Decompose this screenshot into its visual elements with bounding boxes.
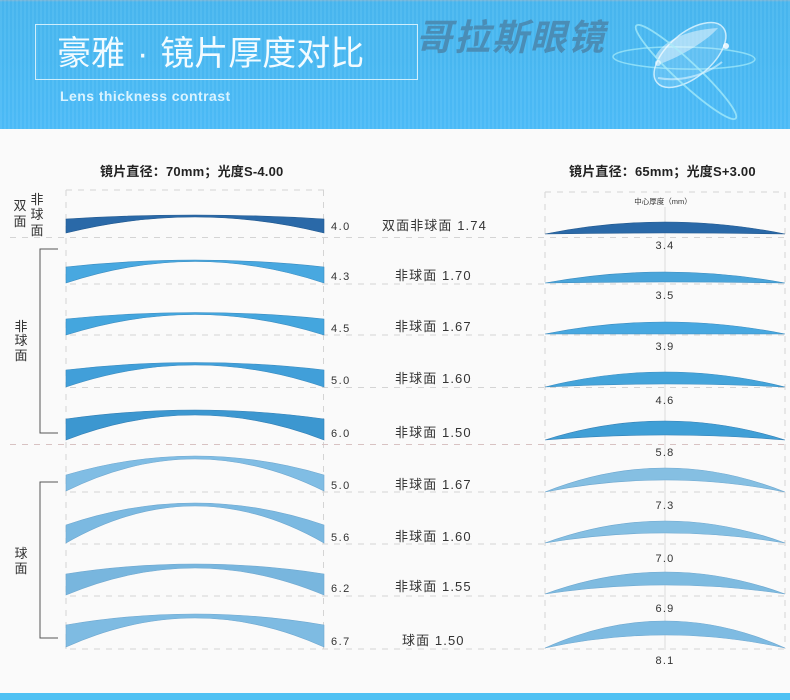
right thickness values: 5.8	[656, 447, 674, 459]
center thickness caption: 中心厚度（mm）	[634, 196, 692, 206]
left thickness values: 6.7	[331, 636, 351, 648]
title frame	[35, 24, 418, 80]
left lenses: S-4.00 profiles	[66, 215, 324, 647]
subtitle: Lens thickness contrast	[60, 88, 231, 104]
lens type and index labels: 非球面 1.55	[395, 579, 472, 594]
lens type and index labels: 双面非球面 1.74	[382, 218, 487, 233]
header banner	[0, 0, 790, 129]
lens type and index labels: 非球面 1.60	[395, 371, 472, 386]
lens type and index labels: 非球面 1.67	[395, 319, 472, 334]
right thickness values: 7.3	[656, 500, 674, 512]
left column header: 镜片直径：70mm；光度S-4.00	[100, 164, 283, 180]
category label: spherical: 面	[14, 561, 28, 576]
left thickness values: 4.5	[331, 323, 351, 335]
left thickness values	[331, 221, 351, 648]
lens type and index labels: 非球面 1.50	[395, 425, 472, 440]
left thickness values: 6.2	[331, 583, 351, 595]
right thickness values: 3.9	[656, 341, 674, 353]
watermark brand: 哥拉斯眼镜	[416, 17, 606, 58]
lens type and index labels: 非球面 1.67	[395, 477, 472, 492]
right thickness values: 8.1	[656, 655, 674, 667]
category label: aspheric: 面	[14, 348, 28, 363]
lens type and index labels: 球面 1.50	[402, 633, 465, 648]
icon: lens with orbit rings	[612, 22, 756, 120]
category label: double aspheric	[13, 192, 44, 238]
bracket: aspheric	[40, 249, 58, 433]
lens type and index labels	[382, 218, 487, 648]
left thickness values: 4.3	[331, 271, 351, 283]
lens type and index labels: 非球面 1.70	[395, 268, 472, 283]
category label: double aspheric: 球	[30, 207, 44, 222]
right column header: 镜片直径：65mm；光度S+3.00	[569, 164, 756, 180]
right thickness values: 3.5	[656, 290, 674, 302]
left thickness values: 5.0	[331, 480, 351, 492]
bracket: spherical	[40, 482, 58, 638]
category label: double aspheric: 面	[30, 223, 44, 238]
left thickness values: 5.0	[331, 375, 351, 387]
category label: aspheric: 非	[14, 319, 28, 334]
category label: spherical	[14, 546, 28, 576]
category label: aspheric: 球	[14, 333, 28, 348]
category label: double aspheric: 双	[13, 198, 27, 213]
right thickness values: 6.9	[656, 603, 674, 615]
right thickness values: 4.6	[656, 395, 674, 407]
category label: aspheric	[14, 319, 28, 363]
title: 豪雅 · 镜片厚度对比	[57, 35, 364, 73]
right lenses: S+3.00 profiles	[545, 222, 785, 648]
left thickness values: 4.0	[331, 221, 351, 233]
right thickness values: 7.0	[656, 553, 674, 565]
lens type and index labels: 非球面 1.60	[395, 529, 472, 544]
category label: spherical: 球	[14, 546, 28, 561]
category label: double aspheric: 非	[30, 192, 44, 207]
category label: double aspheric: 面	[13, 214, 27, 229]
left thickness values: 5.6	[331, 532, 351, 544]
right thickness values: 3.4	[656, 240, 674, 252]
left thickness values: 6.0	[331, 428, 351, 440]
footer band	[0, 693, 790, 700]
right thickness values	[656, 240, 674, 667]
